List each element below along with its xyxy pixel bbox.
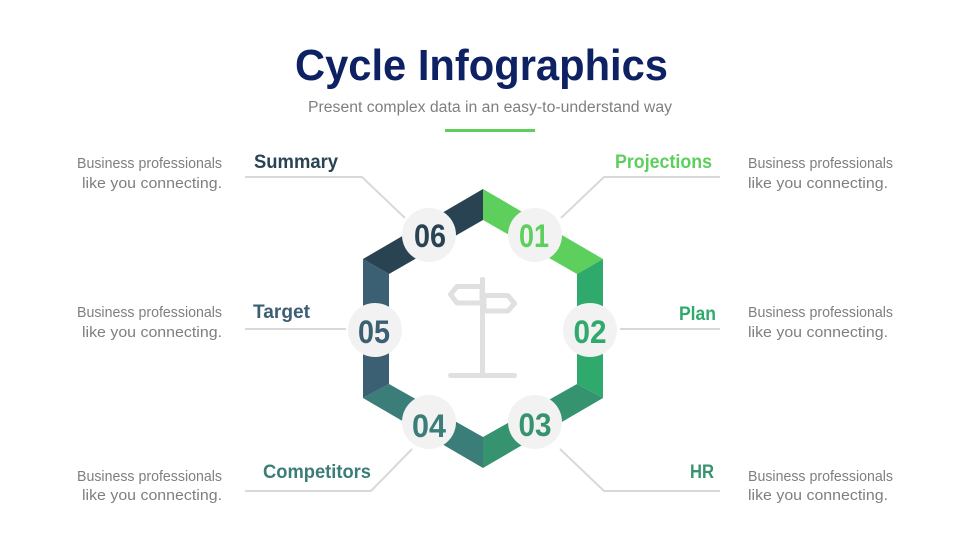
step 02: plan: Plan — [679, 303, 716, 325]
step 05: target: Business professionals — [77, 304, 222, 321]
step 04: competitors: Competitors — [263, 461, 371, 483]
subtitle: Present complex data in an easy-to-understand way — [308, 99, 672, 116]
step 04: competitors — [77, 395, 456, 504]
step 01: projections — [508, 151, 893, 262]
step 04: competitors: like you connecting. — [82, 487, 222, 504]
step 01: projections: Business professionals — [748, 155, 893, 172]
step 03: hr: HR — [690, 461, 714, 483]
step 06: summary: like you connecting. — [82, 175, 222, 192]
step 06: summary — [77, 151, 456, 262]
step 01: projections: 01 — [519, 218, 549, 254]
step 03: hr — [508, 395, 893, 504]
step 03: hr: like you connecting. — [748, 487, 888, 504]
step 01: projections: Projections — [615, 151, 712, 173]
step 04: competitors: 04 — [412, 408, 446, 444]
step 06: summary: Business professionals — [77, 155, 222, 172]
step 02: plan: Business professionals — [748, 304, 893, 321]
title: Cycle Infographics — [295, 41, 668, 90]
step 03: hr: 03 — [518, 407, 552, 443]
step 06: summary: Summary — [254, 151, 338, 173]
step 06: summary: 06 — [414, 218, 446, 254]
hexagon cycle ring — [363, 189, 603, 468]
title accent bar — [445, 129, 535, 132]
step 05: target: 05 — [358, 314, 390, 350]
step 01: projections: like you connecting. — [748, 175, 888, 192]
step 05: target: Target — [253, 301, 310, 323]
step 02: plan: like you connecting. — [748, 324, 888, 341]
icon: signpost — [448, 277, 517, 378]
step 05: target — [77, 301, 402, 357]
step 02: plan — [563, 303, 893, 357]
step 02: plan: 02 — [574, 314, 606, 350]
step 03: hr: Business professionals — [748, 468, 893, 485]
step 04: competitors: Business professionals — [77, 468, 222, 485]
step 05: target: like you connecting. — [82, 324, 222, 341]
